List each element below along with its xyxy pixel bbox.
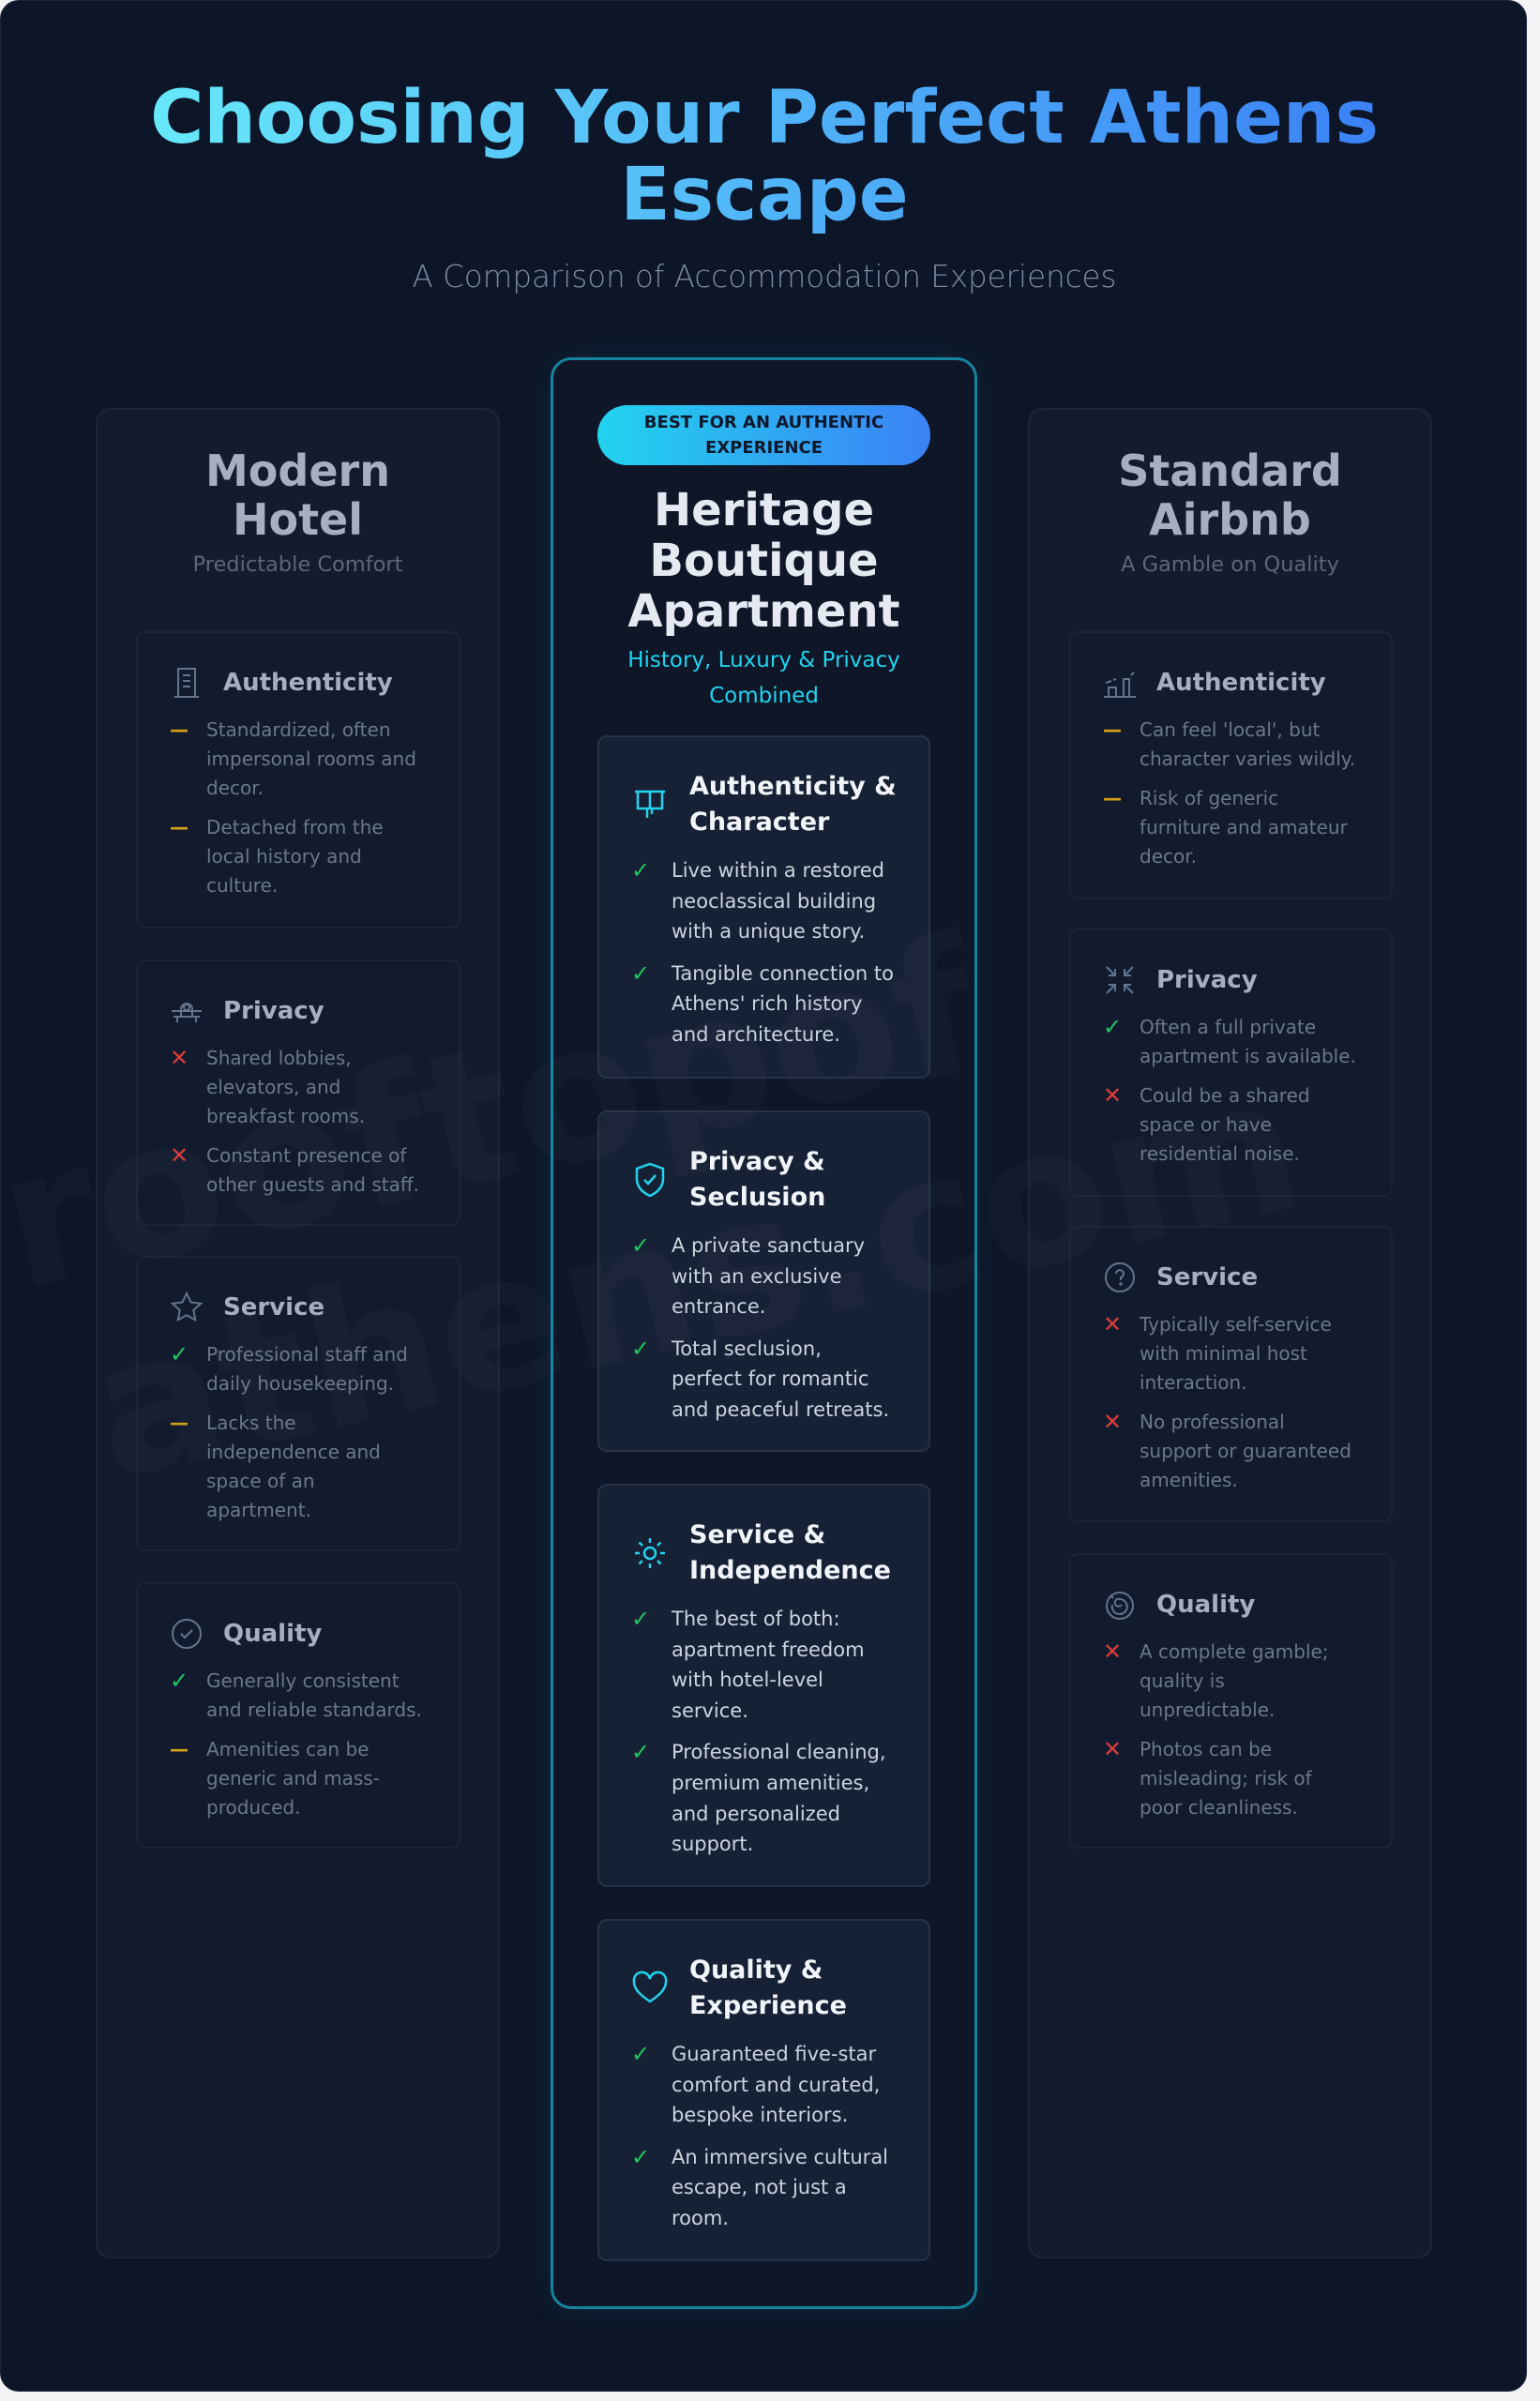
heading: authenticity: Authenticity [1156,669,1326,697]
heading: service [171,1291,325,1322]
card: hotel privacy: ✕ [170,1045,189,1071]
heading: service [1105,1262,1258,1292]
heading: Authenticity & Character [689,772,897,837]
card: quality & experience: An immersive cultural escape, not just a room. [672,2146,888,2229]
card: quality & experience [597,1919,930,2261]
card: hotel service: — [170,1412,189,1434]
card: hotel service: Professional staff and daily housekeeping. [206,1343,408,1395]
heading: quality [172,1619,322,1649]
card: airbnb privacy: Could be a shared space or have residential noise. [1140,1084,1310,1165]
heading: Privacy & Seclusion [689,1147,825,1212]
heading: standard airbnb: Standard [1118,445,1342,496]
card: hotel quality: Amenities can be generic and mass-produced. [206,1738,380,1819]
card: hotel authenticity: — [170,718,189,741]
card: airbnb service: ✕ [1103,1409,1122,1435]
card: hotel service [136,1256,460,1551]
card: hotel service: Lacks the independence and space of an apartment. [206,1412,381,1521]
heading: standard airbnb: Airbnb [1149,494,1311,545]
watermark [0,839,1318,1529]
card: hotel quality: Generally consistent and reliable standards. [206,1669,422,1721]
watermark: athens.com [73,1034,1320,1523]
card: quality & experience: Guaranteed five-star comfort and curated, bespoke interiors. [672,2043,880,2126]
card: airbnb service: Typically self-service with minimal host interaction. [1140,1313,1332,1394]
card: airbnb service: support or guaranteed [1140,1440,1351,1462]
card: authenticity & character: and architecture. [672,1023,840,1046]
heading: standard airbnb [1118,445,1342,545]
heading: modern hotel [205,445,390,545]
card: privacy & seclusion: ✓ [631,1336,650,1362]
card: authenticity & character: ✓ [631,960,650,987]
badge: best for authentic experience: BEST FOR AN AUTHENTIC [644,413,883,432]
heading: modern hotel: Hotel [233,494,363,545]
card: airbnb quality [1069,1553,1393,1849]
card: hotel privacy: ✕ [170,1142,189,1169]
card: hotel privacy [136,959,460,1226]
card: service & independence: ✓ [631,1606,650,1632]
card: quality & experience: ✓ [631,2041,650,2067]
badge: best for authentic experience [597,405,930,465]
heading: quality: Quality [1156,1591,1255,1619]
heading: service: Service [1156,1263,1258,1291]
card: hotel privacy: Constant presence of other guests and staff. [206,1144,419,1196]
card: airbnb authenticity: Can feel 'local', but character varies wildly. [1140,718,1355,770]
card: airbnb quality: Photos can be misleading; risk of poor cleanliness. [1140,1738,1312,1819]
card: airbnb quality: ✕ [1103,1736,1122,1762]
panel: modern hotel [96,408,500,2258]
card: authenticity & character: Tangible connection to [672,962,894,985]
heading: heritage boutique apartment [627,484,900,638]
heading: Quality & Experience [689,1956,847,2020]
card: authenticity & character [597,735,930,1079]
card: service & independence: ✓ [631,1739,650,1765]
card: hotel authenticity: — [170,816,189,838]
card: airbnb privacy: ✓ [1103,1014,1122,1040]
heading: quality: Quality [223,1620,322,1648]
heading: heritage boutique apartment: Boutique [649,535,879,587]
card: airbnb quality: ✕ [1103,1638,1122,1665]
card: hotel quality [136,1582,460,1849]
card: airbnb privacy: Often a full private apartment is available. [1140,1016,1356,1067]
card: service & independence [597,1484,930,1887]
card: hotel authenticity: Detached from the local history and culture. [206,816,384,897]
subheading: gamble on quality: A Gamble on Quality [1121,552,1339,577]
card: privacy & seclusion: ✓ [631,1232,650,1259]
subheading: history luxury privacy [627,648,900,708]
subheading: predictable comfort: Predictable Comfort [193,552,402,577]
card: airbnb authenticity: — [1103,718,1122,741]
card: quality & experience: ✓ [631,2144,650,2170]
title [1,80,1528,234]
card: hotel privacy: Shared lobbies, elevators, and breakfast rooms. [206,1047,365,1127]
title: Escape [620,153,909,237]
heading: service: Service [223,1293,325,1321]
panel: heritage boutique apartment [551,357,977,2309]
card: airbnb service [1069,1226,1393,1522]
card: airbnb service: amenities. [1140,1469,1238,1491]
card: privacy & seclusion: Total seclusion, perfect for romantic and peaceful retreats. [672,1337,889,1421]
heading: privacy: Privacy [1156,966,1258,994]
subheading: history luxury privacy: Combined [709,684,819,708]
card: airbnb privacy [1069,929,1393,1197]
heading: quality [1106,1591,1255,1620]
card: hotel quality: ✓ [170,1668,189,1694]
card: airbnb authenticity [1069,631,1393,899]
card: service & independence: The best of both: apartment freedom with hotel-level service. [672,1608,865,1722]
card: airbnb quality: A complete gamble; quality is unpredictable. [1140,1640,1329,1721]
subtitle: A Comparison of Accommodation Experiences [413,259,1116,294]
title: Choosing Your Perfect Athens [150,76,1379,160]
card: airbnb authenticity: Risk of generic furniture and amateur decor. [1140,787,1348,868]
card: hotel authenticity [136,631,460,929]
card: hotel quality: — [170,1738,189,1760]
heading: authenticity: Authenticity [223,669,393,697]
panel: standard airbnb [1028,408,1432,2258]
card: airbnb service: ✕ [1103,1311,1122,1337]
subheading: history luxury privacy: History, Luxury & Privacy [627,648,900,672]
card: authenticity & character: Athens' rich history [672,992,862,1015]
card: airbnb service: No professional [1140,1411,1285,1433]
card: airbnb privacy: ✕ [1103,1082,1122,1109]
card: service & independence: Professional cleaning, premium amenities, and personalized support. [672,1741,886,1855]
heading: privacy [172,997,325,1025]
heading: privacy: Privacy [223,997,325,1025]
badge: best for authentic experience: EXPERIENCE [705,438,823,458]
card: airbnb authenticity: — [1103,787,1122,809]
heading: heritage boutique apartment: Heritage [654,484,874,536]
heading: Service & Independence [689,1520,891,1585]
heading: heritage boutique apartment: Apartment [627,585,900,638]
card: authenticity & character: Live within a restored neoclassical building with a unique story. [672,859,884,943]
heading: modern hotel: Modern [205,445,390,496]
card: hotel service: ✓ [170,1341,189,1367]
card: authenticity & character: ✓ [631,857,650,883]
card: hotel authenticity: Standardized, often impersonal rooms and decor. [206,718,416,799]
watermark: rooftopof [0,896,1000,1333]
card: privacy & seclusion: A private sanctuary with an exclusive entrance. [672,1234,865,1318]
card: privacy & seclusion [597,1110,930,1452]
heading: privacy [1106,966,1258,994]
